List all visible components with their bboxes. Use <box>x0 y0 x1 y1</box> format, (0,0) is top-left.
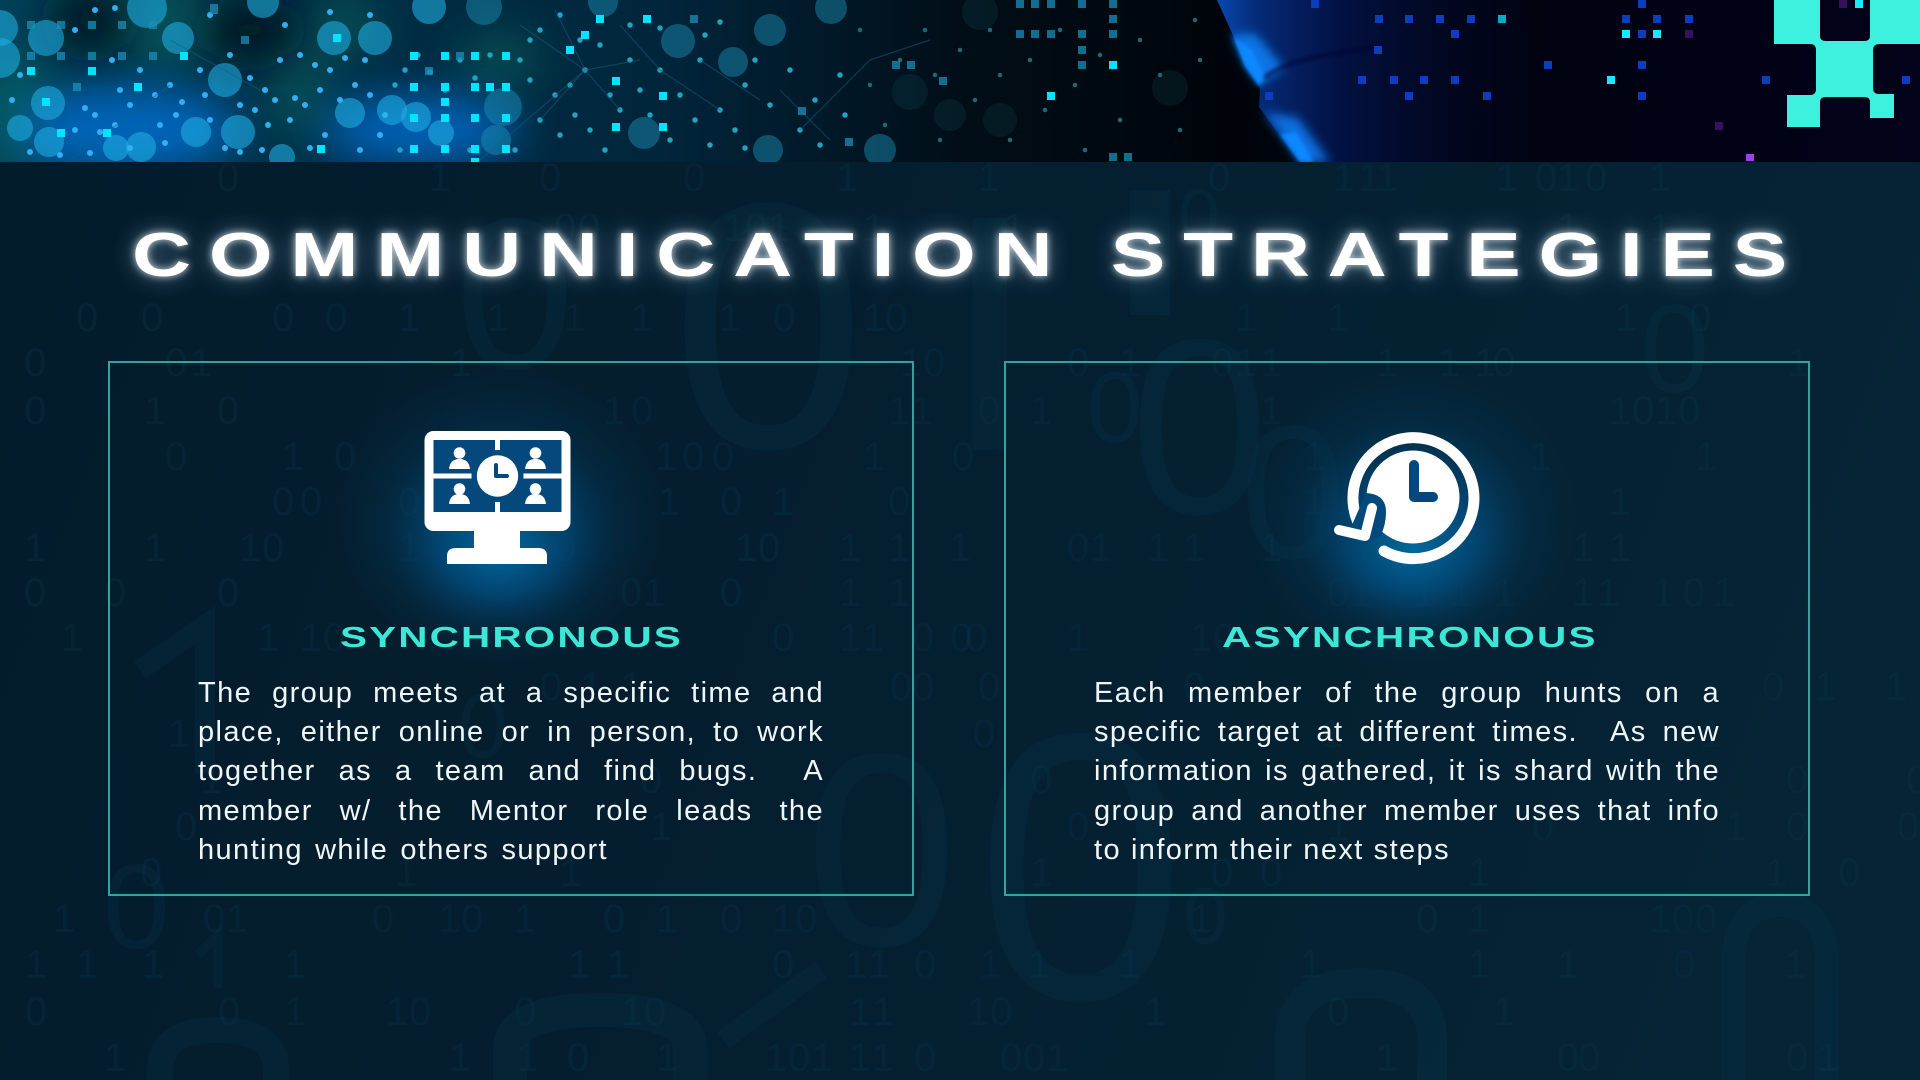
background: binary digits: 001100101110101 <box>25 990 1515 1034</box>
text: asynchronous description: group and another member uses that info <box>1094 795 1720 827</box>
text: asynchronous description <box>1094 677 1720 866</box>
title: COMMUNICATION STRATEGIES <box>132 220 1787 290</box>
panel frame and icon: clock with return arrow <box>1004 361 1810 896</box>
background: binary digits: 0 <box>805 697 958 1004</box>
background: binary digits: 0110000011 <box>540 665 1907 709</box>
background: binary digits: 0 <box>1178 174 1220 258</box>
bokeh circles <box>0 0 454 170</box>
text: synchronous description: place, either online or in person, to work <box>198 716 824 748</box>
text: synchronous description <box>198 677 824 866</box>
text: asynchronous description: information is gathered, it is shard with the <box>1094 755 1720 787</box>
background: binary digits: 0011100101111101 <box>24 341 1809 385</box>
background: binary digits: 101010101010101100 <box>53 897 1717 941</box>
background: binary digits: 0000111110101110 <box>76 296 1711 340</box>
background: binary digits: 01010100 <box>175 805 1919 849</box>
text: asynchronous description: to inform their next steps <box>1094 834 1450 866</box>
background: binary digits: 0 <box>1240 387 1346 599</box>
background: binary digits: 11101101011101111111 <box>24 526 1631 570</box>
background: binary digits: 01010110111010 <box>24 389 1700 433</box>
logo: teal pixel mark <box>1774 0 1920 127</box>
background: binary digits: 0 <box>1087 352 1143 464</box>
panel: asynchronous <box>1004 361 1810 896</box>
background: binary digits: 0 <box>975 654 1186 1079</box>
background: binary digits: 1110011000 110 <box>61 616 1235 660</box>
heading: synchronous: SYNCHRONOUS <box>340 622 681 654</box>
pixel squares <box>27 15 1506 162</box>
background: binary digits: 001011111 <box>554 206 1671 250</box>
background: binary digits: 1110110111000110001 <box>104 1036 1839 1080</box>
background: binary digits: 0 <box>1183 871 1228 960</box>
background: binary digits: 01010010111 <box>165 435 1717 479</box>
background: binary digits: 0 <box>671 131 866 522</box>
heading: asynchronous: ASYNCHRONOUS <box>1222 622 1596 654</box>
background: binary digits: 0 <box>455 173 575 414</box>
network dots <box>12 8 385 155</box>
background: binary digits: 10000 <box>200 758 1920 802</box>
background: binary digits: 1011 <box>168 712 1722 756</box>
header image band: network and face <box>0 0 1920 162</box>
text: synchronous description: member w/ the Mentor role leads the <box>198 795 824 827</box>
panel: synchronous <box>108 361 914 896</box>
text: synchronous description: The group meets at a specific time and <box>198 677 824 709</box>
background: binary digits: 011100110 <box>140 851 1860 895</box>
text: asynchronous description: Each member of the group hunts on a <box>1094 677 1720 709</box>
background: binary digits: 01001101111010 1 <box>217 156 1671 200</box>
background: binary digits: 0 <box>103 840 170 974</box>
panel frame and icon: monitor with clock <box>108 361 914 896</box>
text: synchronous description: together as a team and find bugs. A <box>198 755 824 787</box>
text: synchronous description: hunting while others support <box>198 834 608 866</box>
background: binary digits: 111111011011111101 <box>25 943 1806 987</box>
text: asynchronous description: specific target at different times. As new <box>1094 716 1720 748</box>
background: binary digits: 000010110111111101 <box>24 571 1735 615</box>
background: binary digits: 0 <box>1640 280 1710 419</box>
background: binary digits: 0 <box>1130 287 1269 566</box>
background: binary digits: 000101011 <box>272 480 1631 524</box>
background: binary digits: 0 <box>458 677 508 777</box>
face silhouette <box>1217 0 1560 162</box>
